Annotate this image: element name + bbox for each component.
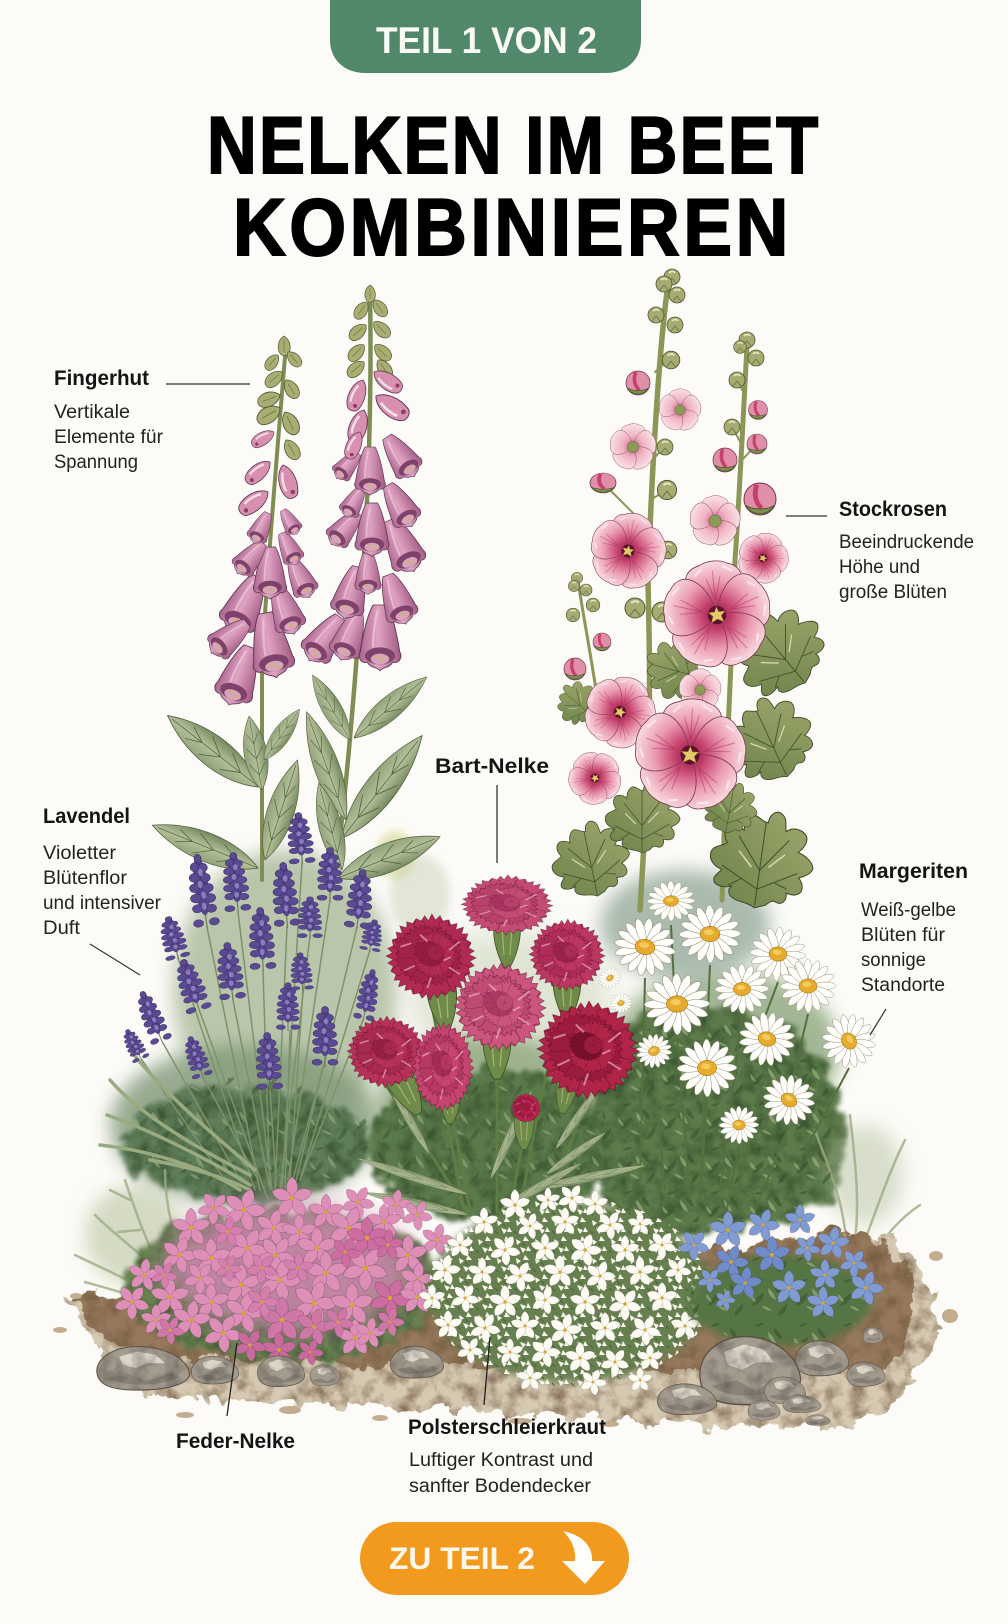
label: Margeriten: Margeriten xyxy=(859,860,968,883)
blue star flowers xyxy=(672,1203,889,1319)
daisy blooms xyxy=(594,880,889,1145)
label: Polsterschleierkraut: Luftiger Kontrast und xyxy=(409,1450,593,1471)
label: Margeriten: sonnige xyxy=(861,950,926,971)
foxglove left spike xyxy=(202,336,322,712)
plant: feder-nelke pink groundcover xyxy=(107,1177,458,1370)
title: NELKEN IM BEET xyxy=(207,100,818,190)
foxglove right spike xyxy=(295,285,430,671)
plant: blue groundcover xyxy=(672,1203,889,1346)
pink mound base xyxy=(125,1206,445,1361)
pale feathery grasses xyxy=(75,1115,920,1300)
label: Stockrosen xyxy=(786,498,974,603)
hollyhock lobed leaves xyxy=(544,592,842,915)
carnation stems and leaves xyxy=(354,950,648,1219)
hollyhock stems xyxy=(578,285,757,910)
white mound base xyxy=(428,1198,712,1386)
icon: curved down arrow xyxy=(562,1531,605,1584)
foxglove stems xyxy=(262,292,370,880)
label: Polsterschleierkraut: Polsterschleierkraut xyxy=(408,1416,606,1439)
plant: marguerite daisies xyxy=(594,880,889,1222)
pink star flowers xyxy=(107,1177,458,1370)
plant: lavender xyxy=(100,811,385,1200)
white star flowers xyxy=(418,1178,729,1400)
label: Bart-Nelke: Bart-Nelke xyxy=(435,755,549,778)
title: KOMBINIEREN xyxy=(233,182,788,273)
label: Margeriten: Standorte xyxy=(861,975,945,996)
lavender spikes xyxy=(119,811,385,1092)
label: Feder-Nelke xyxy=(176,1343,295,1453)
plant: bart-nelke carnations xyxy=(344,874,648,1219)
label: Fingerhut: Vertikale xyxy=(54,402,130,423)
label: Lavendel: und intensiver xyxy=(43,893,162,914)
daisy foliage xyxy=(603,925,849,1222)
top tab: part indicator xyxy=(330,0,641,73)
label: Fingerhut: Fingerhut xyxy=(54,367,149,390)
label: Feder-Nelke: Feder-Nelke xyxy=(176,1430,295,1453)
hollyhock buds xyxy=(564,269,776,680)
button: zu Teil 2 xyxy=(360,1522,629,1595)
garden background foliage washes xyxy=(75,831,920,1300)
foxglove leaves xyxy=(147,668,445,891)
label: Stockrosen: Höhe und xyxy=(839,557,920,578)
plant: hollyhock xyxy=(544,269,842,915)
label: Fingerhut xyxy=(54,367,250,473)
plant: polsterschleierkraut white groundcover xyxy=(418,1178,729,1400)
label: Lavendel: Lavendel xyxy=(43,805,130,828)
label: Stockrosen: Beeindruckende xyxy=(839,532,974,553)
plant: foxglove xyxy=(147,285,445,891)
blue plant foliage xyxy=(688,1254,872,1346)
label: Lavendel: Duft xyxy=(43,918,81,939)
button: zu Teil 2: ZU TEIL 2 xyxy=(389,1540,535,1576)
label: Lavendel: Blütenflor xyxy=(43,868,128,889)
label: Bart-Nelke xyxy=(435,755,549,863)
carnation calyxes xyxy=(386,925,581,1150)
top tab: part indicator: TEIL 1 VON 2 xyxy=(376,20,597,61)
border stones xyxy=(97,1327,885,1425)
lavender stems and foliage xyxy=(100,863,370,1200)
label: Fingerhut: Elemente für xyxy=(54,427,164,448)
soil bed xyxy=(53,1232,958,1429)
carnation blooms xyxy=(344,874,641,1123)
label: Stockrosen: große Blüten xyxy=(839,582,947,603)
title xyxy=(207,100,818,273)
label: Margeriten: Weiß-gelbe xyxy=(861,900,956,921)
label: Lavendel xyxy=(43,805,162,975)
label: Stockrosen: Stockrosen xyxy=(839,498,947,521)
label: Polsterschleierkraut xyxy=(408,1337,606,1497)
label: Polsterschleierkraut: sanfter Bodendecker xyxy=(409,1476,592,1497)
hollyhock flowers xyxy=(556,389,798,821)
label: Lavendel: Violetter xyxy=(43,843,117,864)
label: Margeriten xyxy=(859,860,968,1035)
label: Fingerhut: Spannung xyxy=(54,452,138,473)
label: Margeriten: Blüten für xyxy=(861,925,946,946)
